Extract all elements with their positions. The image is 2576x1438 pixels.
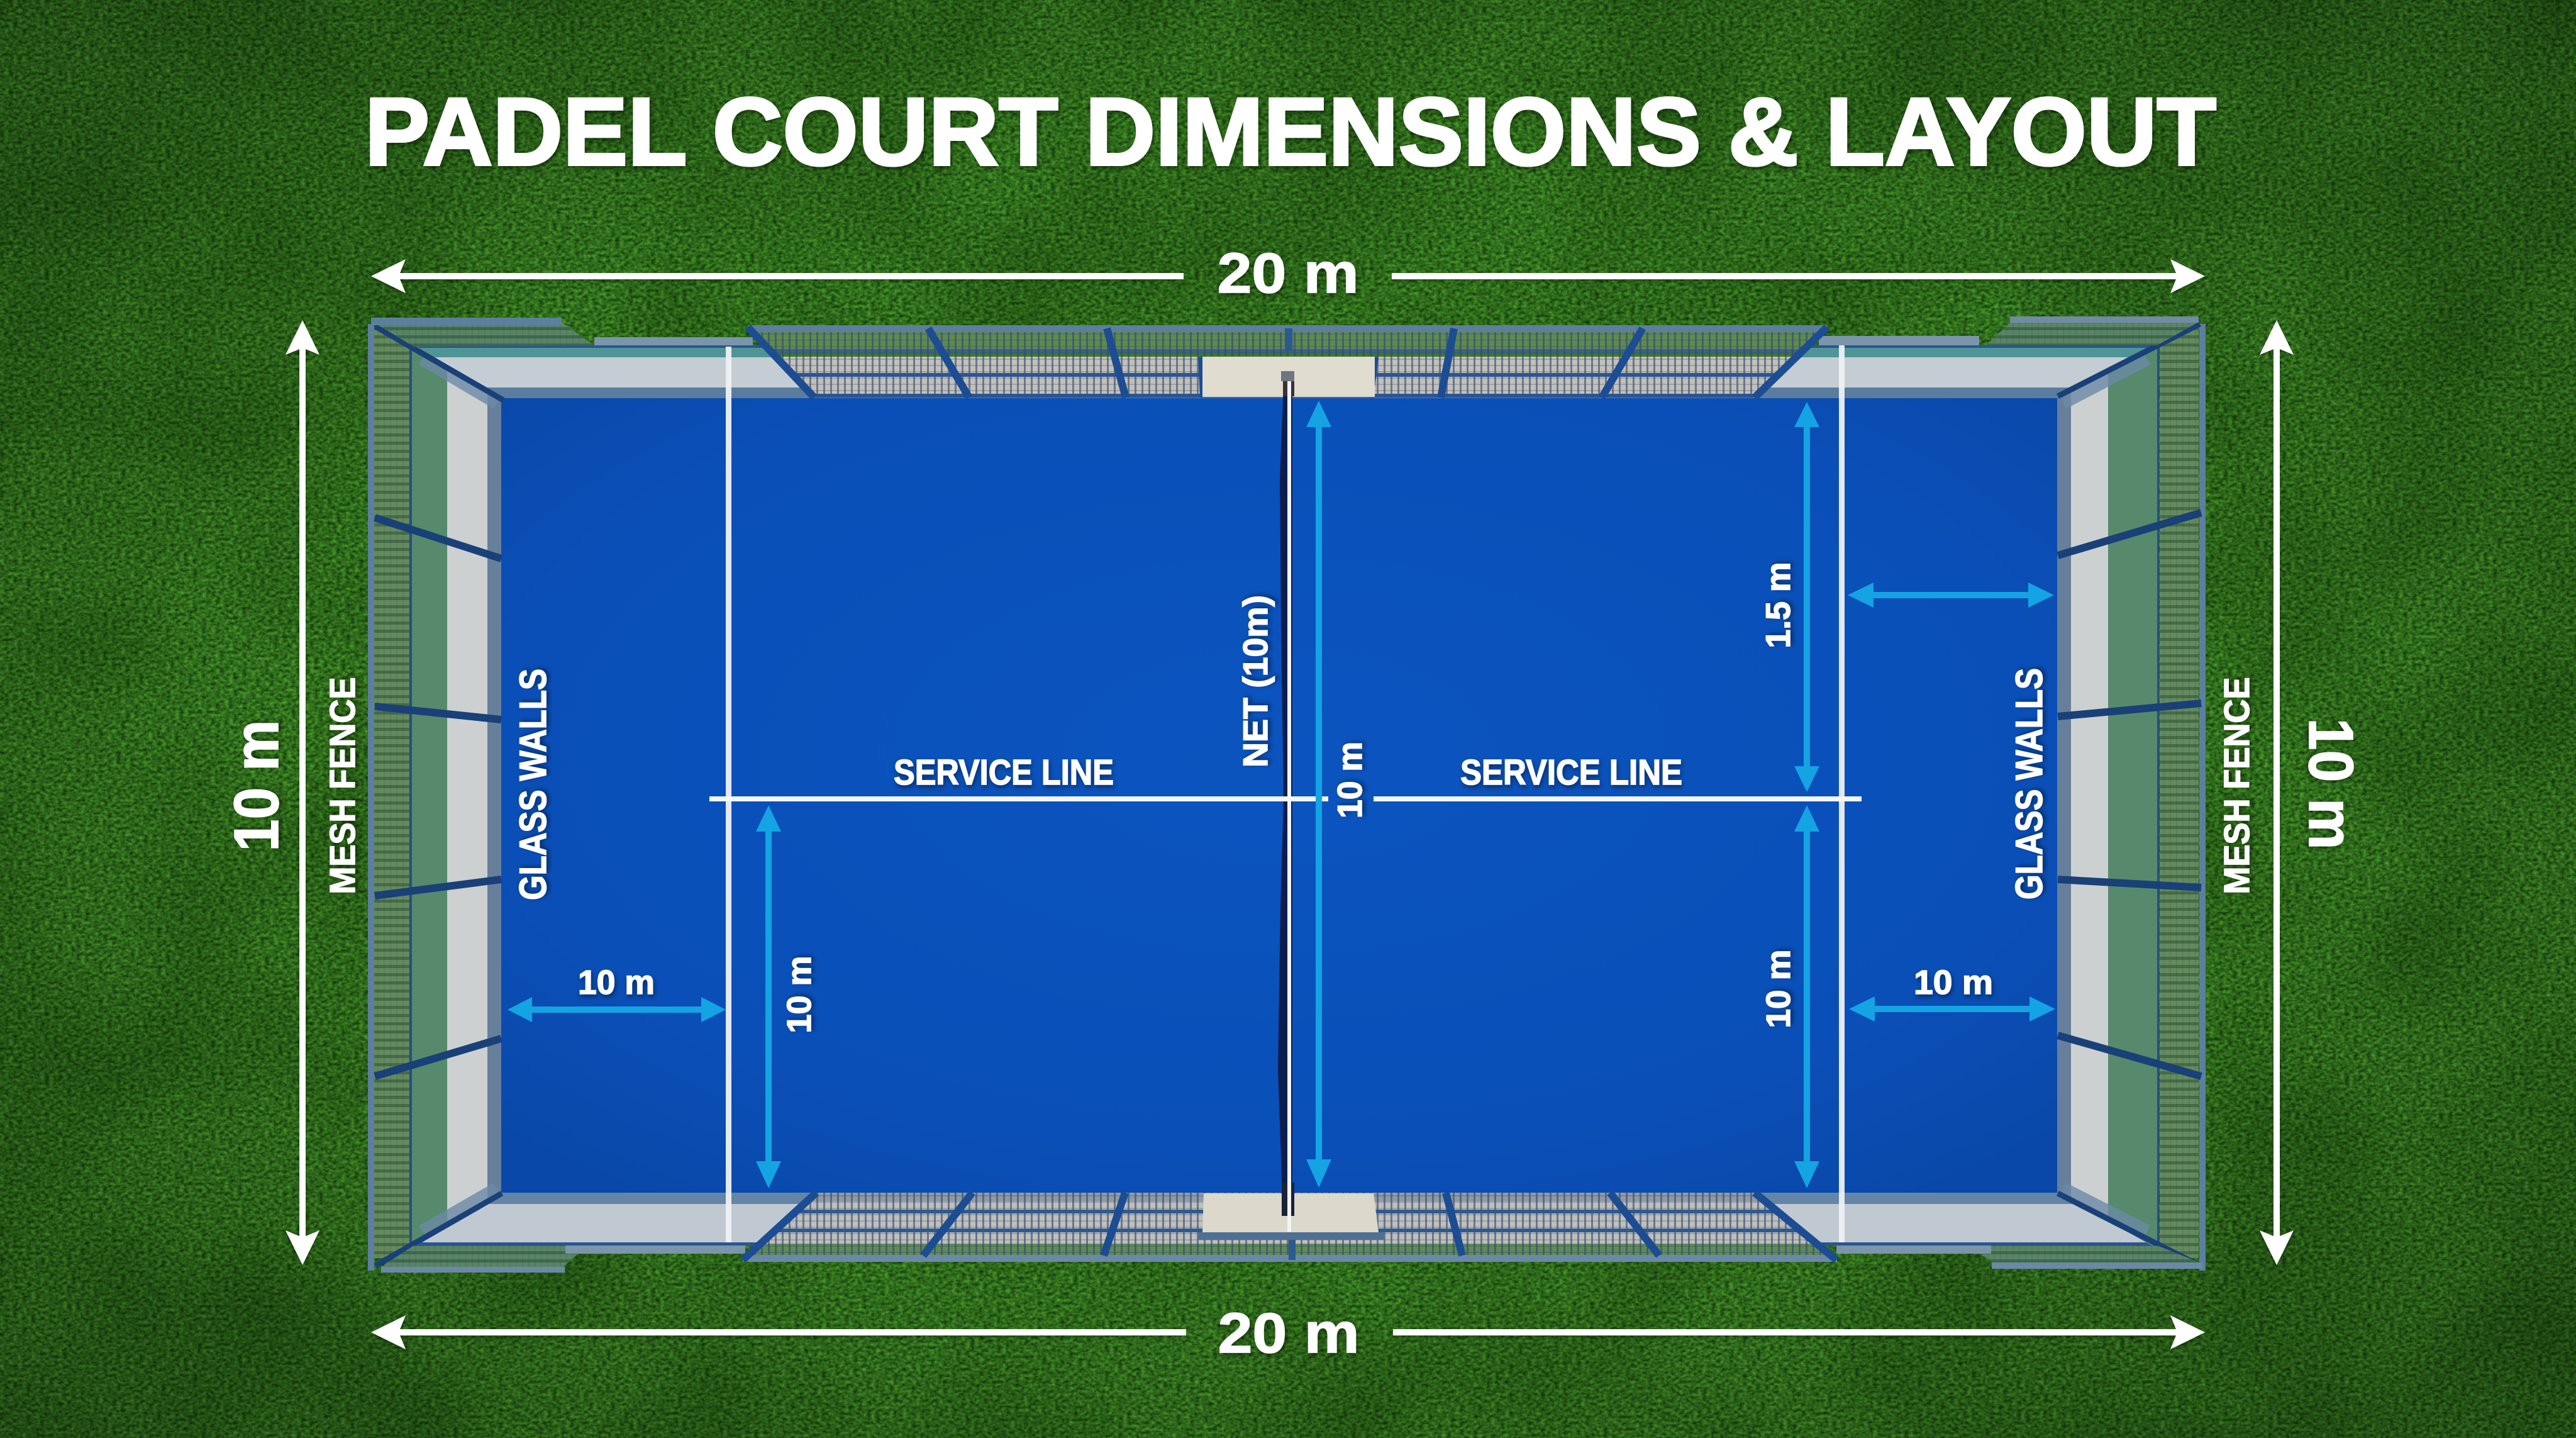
playing surface — [501, 398, 2058, 1193]
label: right service line: SERVICE LINE — [1460, 752, 1682, 793]
arrow: right lower back zone width — [1849, 996, 2055, 1022]
net — [1278, 371, 1294, 1232]
corner glass beams — [423, 359, 2147, 1232]
arrow: right 10 m — [2260, 320, 2294, 1265]
arrow: left 10 m — [286, 320, 319, 1265]
corner fences — [371, 316, 2202, 1273]
arrow: top 20 m — [371, 259, 2205, 293]
bottom gate fence — [736, 1193, 1843, 1262]
corner diagonals and cross bars — [375, 324, 2201, 1266]
label: right lower service depth 10 m: 10 m — [1760, 950, 1797, 1028]
label: 1.5 m: 1.5 m — [1758, 562, 1797, 648]
arrow: right upper service depth — [1794, 402, 1819, 792]
arrow: right upper back zone width — [1848, 582, 2054, 608]
arrow: bottom 20 m — [371, 1315, 2205, 1349]
label: left 10 m: 10 m — [221, 720, 292, 852]
right side wall — [2057, 324, 2206, 1271]
label: net: NET (10m) — [1236, 595, 1275, 767]
top gate fence — [742, 325, 1836, 398]
arrow: right lower service depth — [1794, 805, 1819, 1188]
arrow: left service depth — [756, 805, 781, 1188]
title: PADEL COURT DIMENSIONS & LAYOUT — [365, 78, 2216, 186]
label: left service depth 10 m: 10 m — [780, 956, 818, 1033]
top end wall band — [417, 345, 2159, 398]
label: left mesh fence: MESH FENCE — [323, 677, 363, 895]
left side wall — [368, 324, 501, 1271]
service box vertical lines — [726, 345, 1845, 1242]
label: top 20 m: 20 m — [1218, 242, 1358, 305]
label: left service line: SERVICE LINE — [894, 752, 1114, 793]
label: right mesh fence: MESH FENCE — [2217, 677, 2257, 895]
arrow: left back zone width — [508, 997, 726, 1022]
label: left back zone 10 m: 10 m — [578, 964, 655, 1001]
label: bottom 20 m: 20 m — [1218, 1302, 1360, 1365]
arrow: net length — [1306, 401, 1331, 1188]
label: right back zone 10 m: 10 m — [1914, 964, 1993, 1001]
label: right 10 m: 10 m — [2296, 718, 2366, 849]
label: right glass walls: GLASS WALLS — [2008, 668, 2050, 900]
service lines — [709, 796, 1862, 801]
wall bars beside gates — [565, 336, 1991, 1254]
panel: padel court — [368, 316, 2206, 1273]
bottom end wall band — [417, 1191, 2159, 1246]
label: net length 10 m: 10 m — [1330, 742, 1369, 818]
net post concrete blocks — [1198, 357, 1384, 1260]
label: left glass walls: GLASS WALLS — [512, 669, 554, 900]
